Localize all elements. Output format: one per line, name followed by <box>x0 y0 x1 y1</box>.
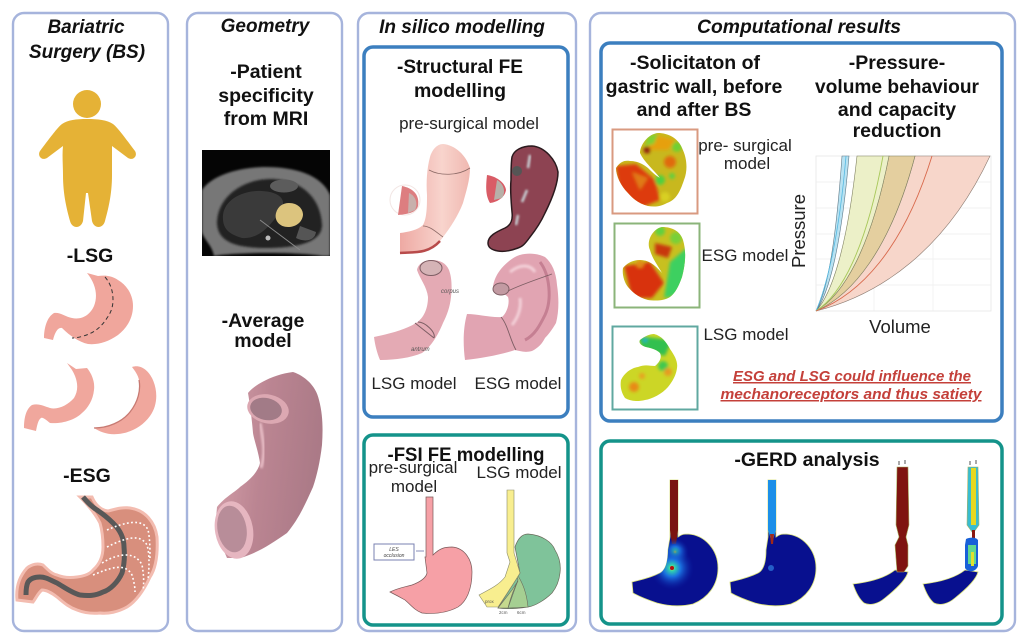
callout: conclusion on satiety <box>720 368 982 403</box>
heading: bariatric surgery <box>29 17 145 63</box>
model: LSG stomach: corpus <box>441 289 459 295</box>
model: LSG stomach: antrum <box>411 347 430 353</box>
text: patient specificity from MRI: specificity <box>218 85 314 107</box>
illustration: resected sleeve stomach <box>24 363 156 434</box>
label: LSG model: LSG model <box>703 325 789 344</box>
model: LSG stomach <box>374 260 459 360</box>
label: pre-surgical model: pre-surgical model <box>399 114 539 133</box>
heading: pressure-volume behaviour: -Pressure- <box>849 52 945 74</box>
heatmap: LSG model <box>612 326 698 410</box>
diagram: LSG FSI geometry: prox <box>485 599 495 604</box>
diagram: LSG FSI geometry <box>479 490 560 615</box>
box: FSI FE modelling <box>364 435 568 625</box>
callout: LES occlusion: LES <box>389 547 399 553</box>
model: pre-surgical textured stomach <box>486 146 558 251</box>
label: pre-surgical model <box>369 458 457 496</box>
text: average model: -Average <box>222 310 305 332</box>
heading: solicitation of gastric wall <box>606 52 782 121</box>
illustration: stomach with LSG cut line <box>44 273 133 344</box>
simulation: LSG reflux low <box>923 460 979 604</box>
label: LSG: -LSG <box>67 245 113 267</box>
callout: LES occlusion: occlusion <box>384 553 405 559</box>
heading: structural FE: modelling <box>414 80 506 102</box>
model: ESG stomach <box>464 254 558 360</box>
heading: bariatric surgery: Bariatric <box>47 17 125 38</box>
heading: pressure-volume behaviour <box>815 52 979 142</box>
heading: GERD analysis: -GERD analysis <box>734 449 880 471</box>
heading: geometry: Geometry <box>221 16 311 37</box>
diagram: LSG FSI geometry: 2cm <box>499 610 508 615</box>
label: LSG model: LSG model <box>476 463 562 482</box>
text: average model: model <box>234 330 292 352</box>
heading: structural FE <box>397 56 523 102</box>
heading: FSI FE: -FSI FE modelling <box>388 444 544 466</box>
heading: pressure-volume behaviour: volume behaviour <box>815 76 979 98</box>
simulation: LSG reflux high <box>853 460 909 604</box>
heatmap: ESG model <box>614 224 700 308</box>
simulation: pre-surgical stomach reflux high <box>632 480 718 606</box>
label: pre-surgical model <box>698 136 792 173</box>
label: pre-surgical model: model <box>391 477 437 496</box>
heading: structural FE: -Structural FE <box>397 56 523 78</box>
panel: in silico modelling <box>358 13 576 631</box>
heading: bariatric surgery: Surgery (BS) <box>29 42 145 63</box>
diagram: LSG FSI geometry: 6cm <box>517 610 526 615</box>
icon: obese person <box>39 90 136 227</box>
text: patient specificity from MRI <box>218 61 314 130</box>
image: MRI scan with stomach highlighted <box>202 150 330 256</box>
chart: pressure-volume curves <box>788 156 991 337</box>
box: structural FE modelling <box>364 47 568 417</box>
box: GERD analysis <box>601 441 1002 624</box>
text: patient specificity from MRI: -Patient <box>230 61 302 83</box>
heading: solicitation of gastric wall: gastric wall, before <box>606 76 782 98</box>
heading: pressure-volume behaviour: and capacity <box>838 99 956 121</box>
callout: conclusion on satiety: mechanoreceptors and thus satiety <box>720 386 982 403</box>
3D model: average stomach <box>210 372 323 562</box>
label: pre-surgical model: pre- surgical <box>698 136 792 155</box>
simulation: pre-surgical stomach reflux low <box>730 480 816 606</box>
label: pre-surgical model: pre-surgical <box>369 458 457 477</box>
label: LSG model: LSG model <box>371 374 457 393</box>
text: average model <box>222 310 305 352</box>
heading: pressure-volume behaviour: reduction <box>853 120 941 142</box>
panel: geometry <box>187 13 342 631</box>
panel: computational results <box>590 13 1015 631</box>
axis label: volume: Volume <box>869 316 931 337</box>
diagram: pre-surgical FSI geometry <box>374 497 472 613</box>
heatmap: pre-surgical model <box>610 130 698 214</box>
axis label: pressure: Pressure <box>788 194 809 268</box>
heading: solicitation of gastric wall: -Solicitaton of <box>630 52 760 74</box>
heading: computational results: Computational results <box>697 17 901 38</box>
label: pre-surgical model: model <box>724 154 770 173</box>
label: ESG: -ESG <box>63 465 111 487</box>
model: pre-surgical pink stomach <box>390 144 470 253</box>
illustration: stomach with endoscope and sutures <box>17 497 157 613</box>
callout: conclusion on satiety: ESG and LSG could influence the <box>733 368 971 385</box>
text: patient specificity from MRI: from MRI <box>224 108 308 130</box>
heading: in silico modelling: In silico modelling <box>379 17 545 38</box>
callout: LES occlusion <box>374 544 424 560</box>
box: solicitation and pressure-volume <box>601 43 1002 421</box>
label: ESG model: ESG model <box>475 374 561 393</box>
heading: solicitation of gastric wall: and after BS <box>637 99 751 121</box>
label: ESG model: ESG model <box>702 246 788 265</box>
panel: bariatric surgery <box>13 13 168 631</box>
